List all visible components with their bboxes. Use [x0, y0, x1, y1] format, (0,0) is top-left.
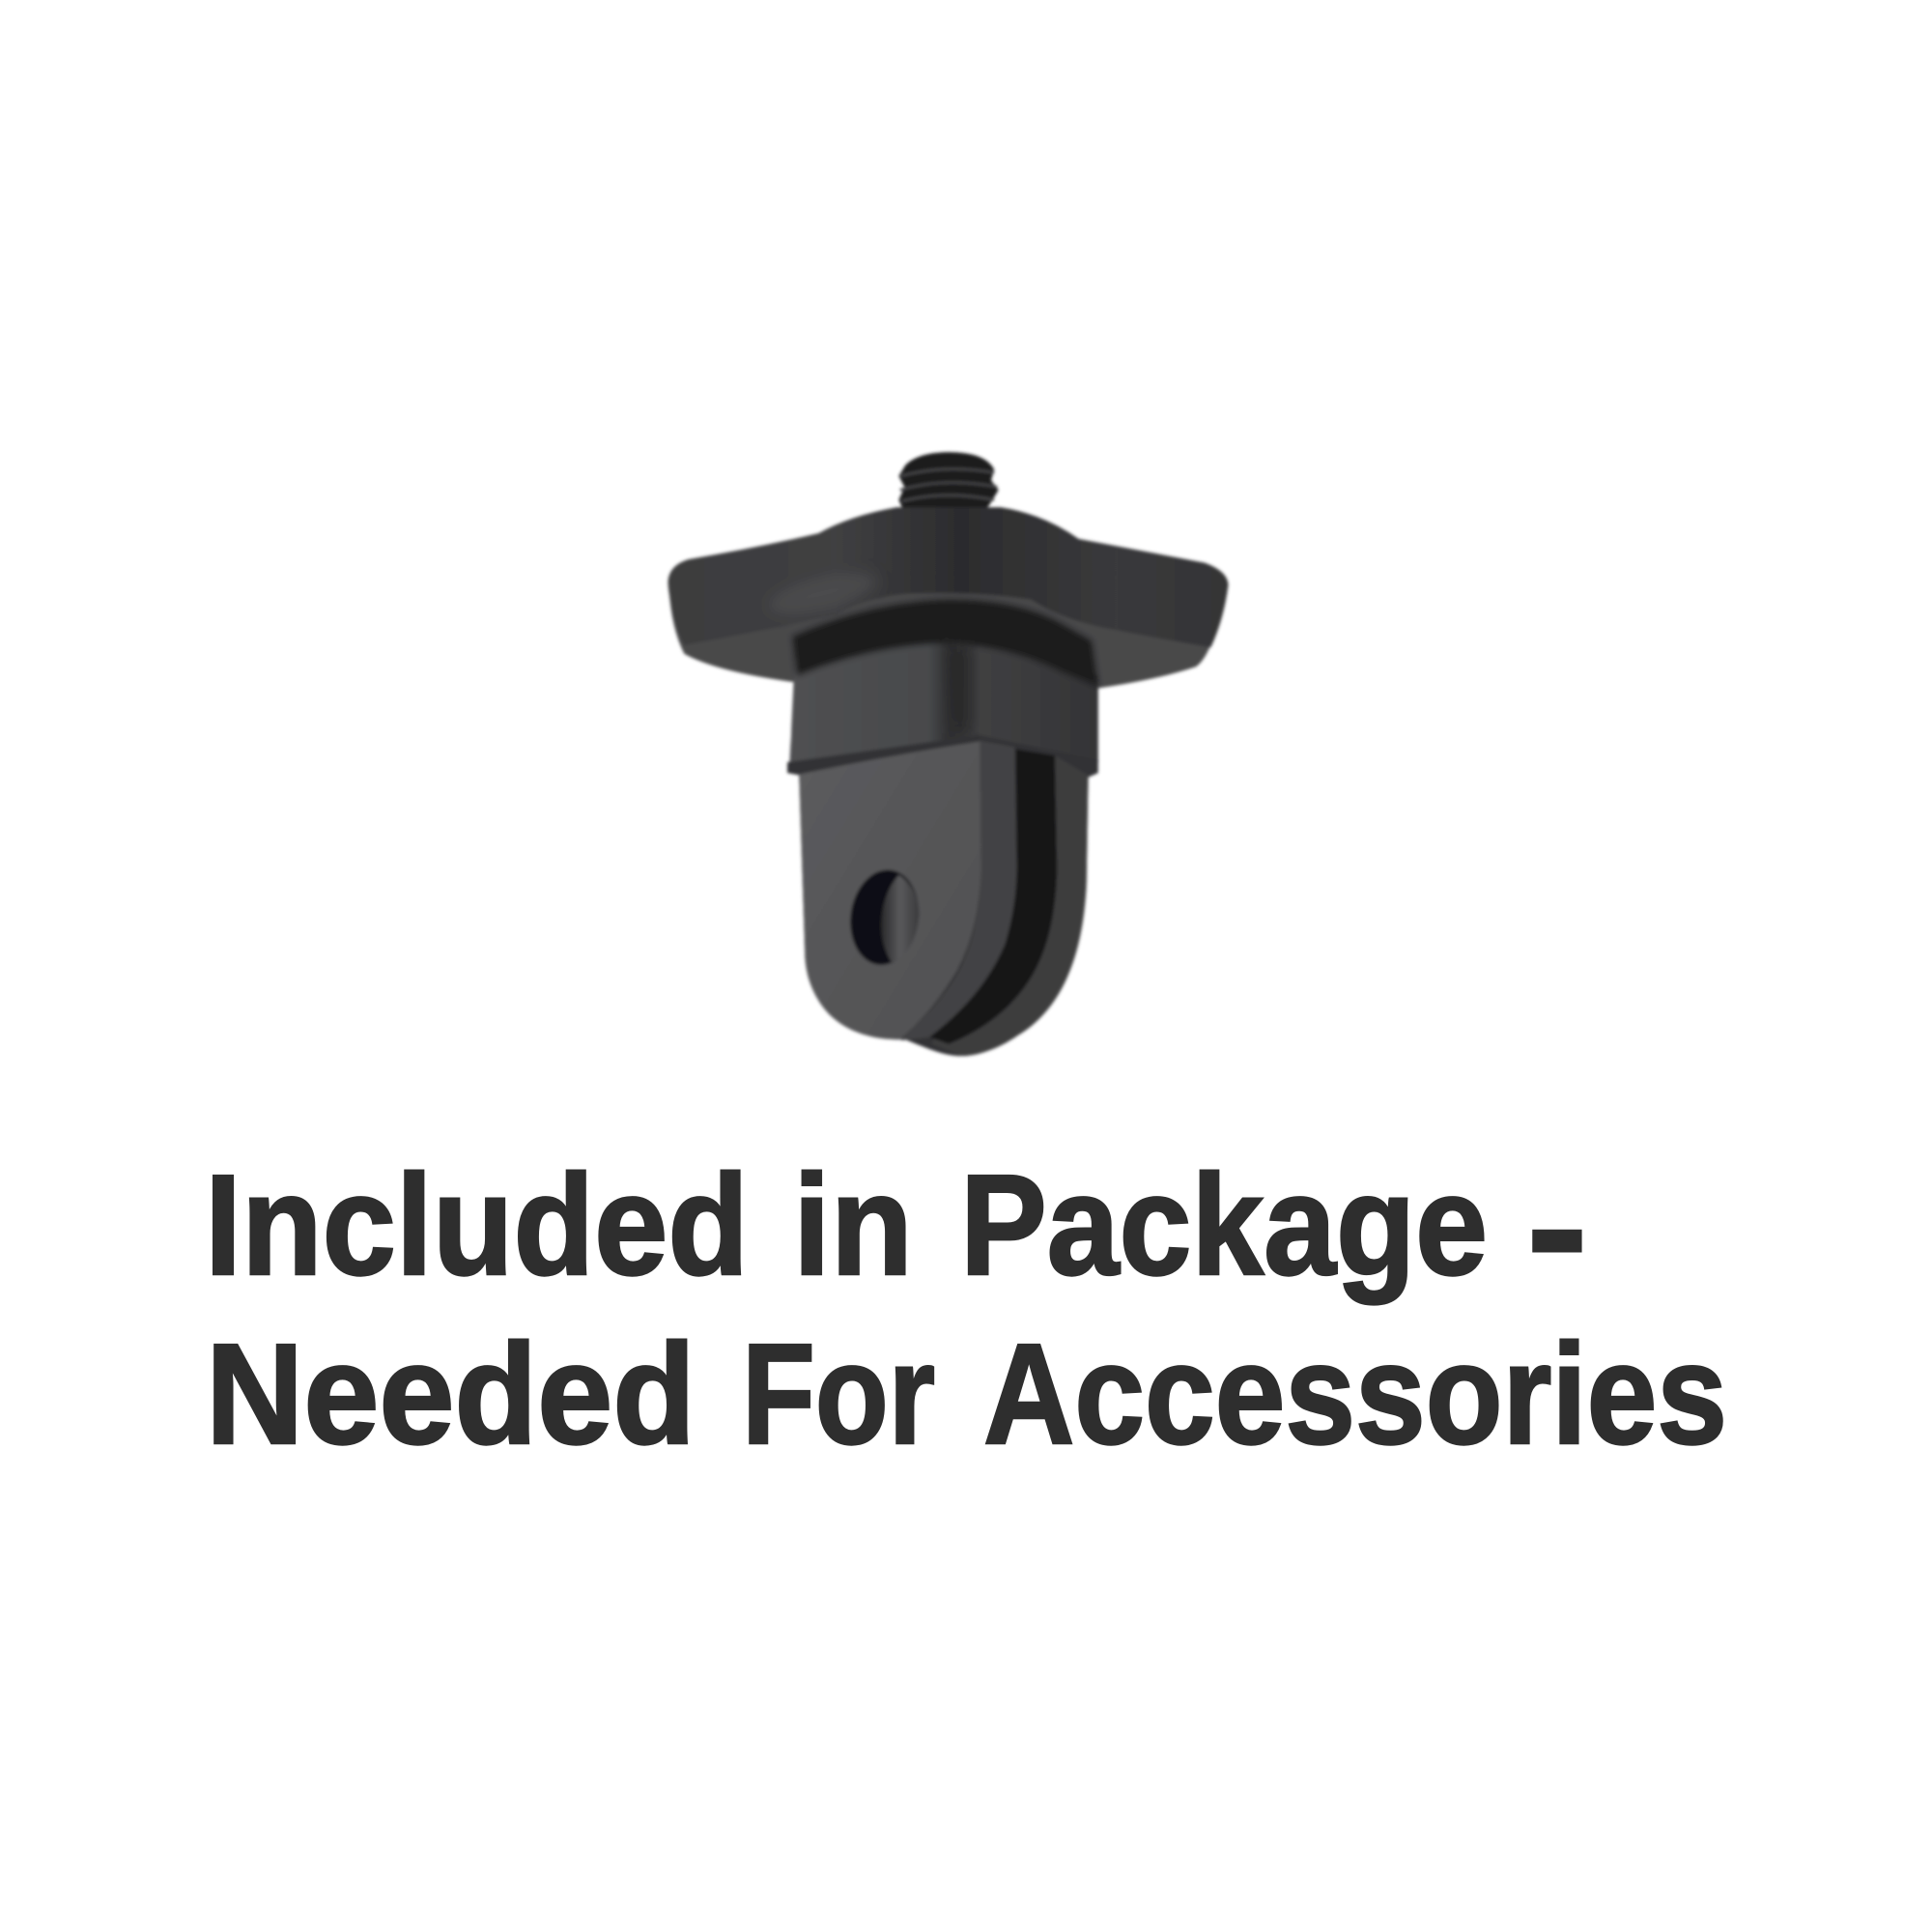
flange underside — [669, 563, 1228, 689]
near arm face — [799, 741, 981, 1039]
screw thread — [898, 452, 999, 515]
caption text — [205, 1146, 1727, 1474]
lower mount silhouette — [787, 735, 1098, 1056]
collar block — [789, 630, 1098, 773]
black slot — [927, 749, 1057, 1044]
caption line 1: Package — [960, 1146, 1488, 1305]
collar shadow band — [793, 600, 1098, 686]
caption line 2: Accessories — [983, 1315, 1727, 1474]
flange top surface — [668, 507, 1228, 647]
hole — [844, 866, 924, 969]
caption line 1: - — [1529, 1150, 1585, 1309]
far arm — [931, 755, 1089, 1056]
caption line 1: in — [793, 1146, 913, 1305]
near arm edge — [901, 741, 1016, 1040]
caption line 2: Needed — [206, 1315, 696, 1474]
flange highlight — [764, 564, 881, 622]
caption line 2: For — [742, 1315, 935, 1474]
caption line 1: Included — [205, 1146, 749, 1305]
collar centre shadow — [947, 643, 970, 734]
product photo: camera mount adapter — [668, 452, 1228, 1056]
